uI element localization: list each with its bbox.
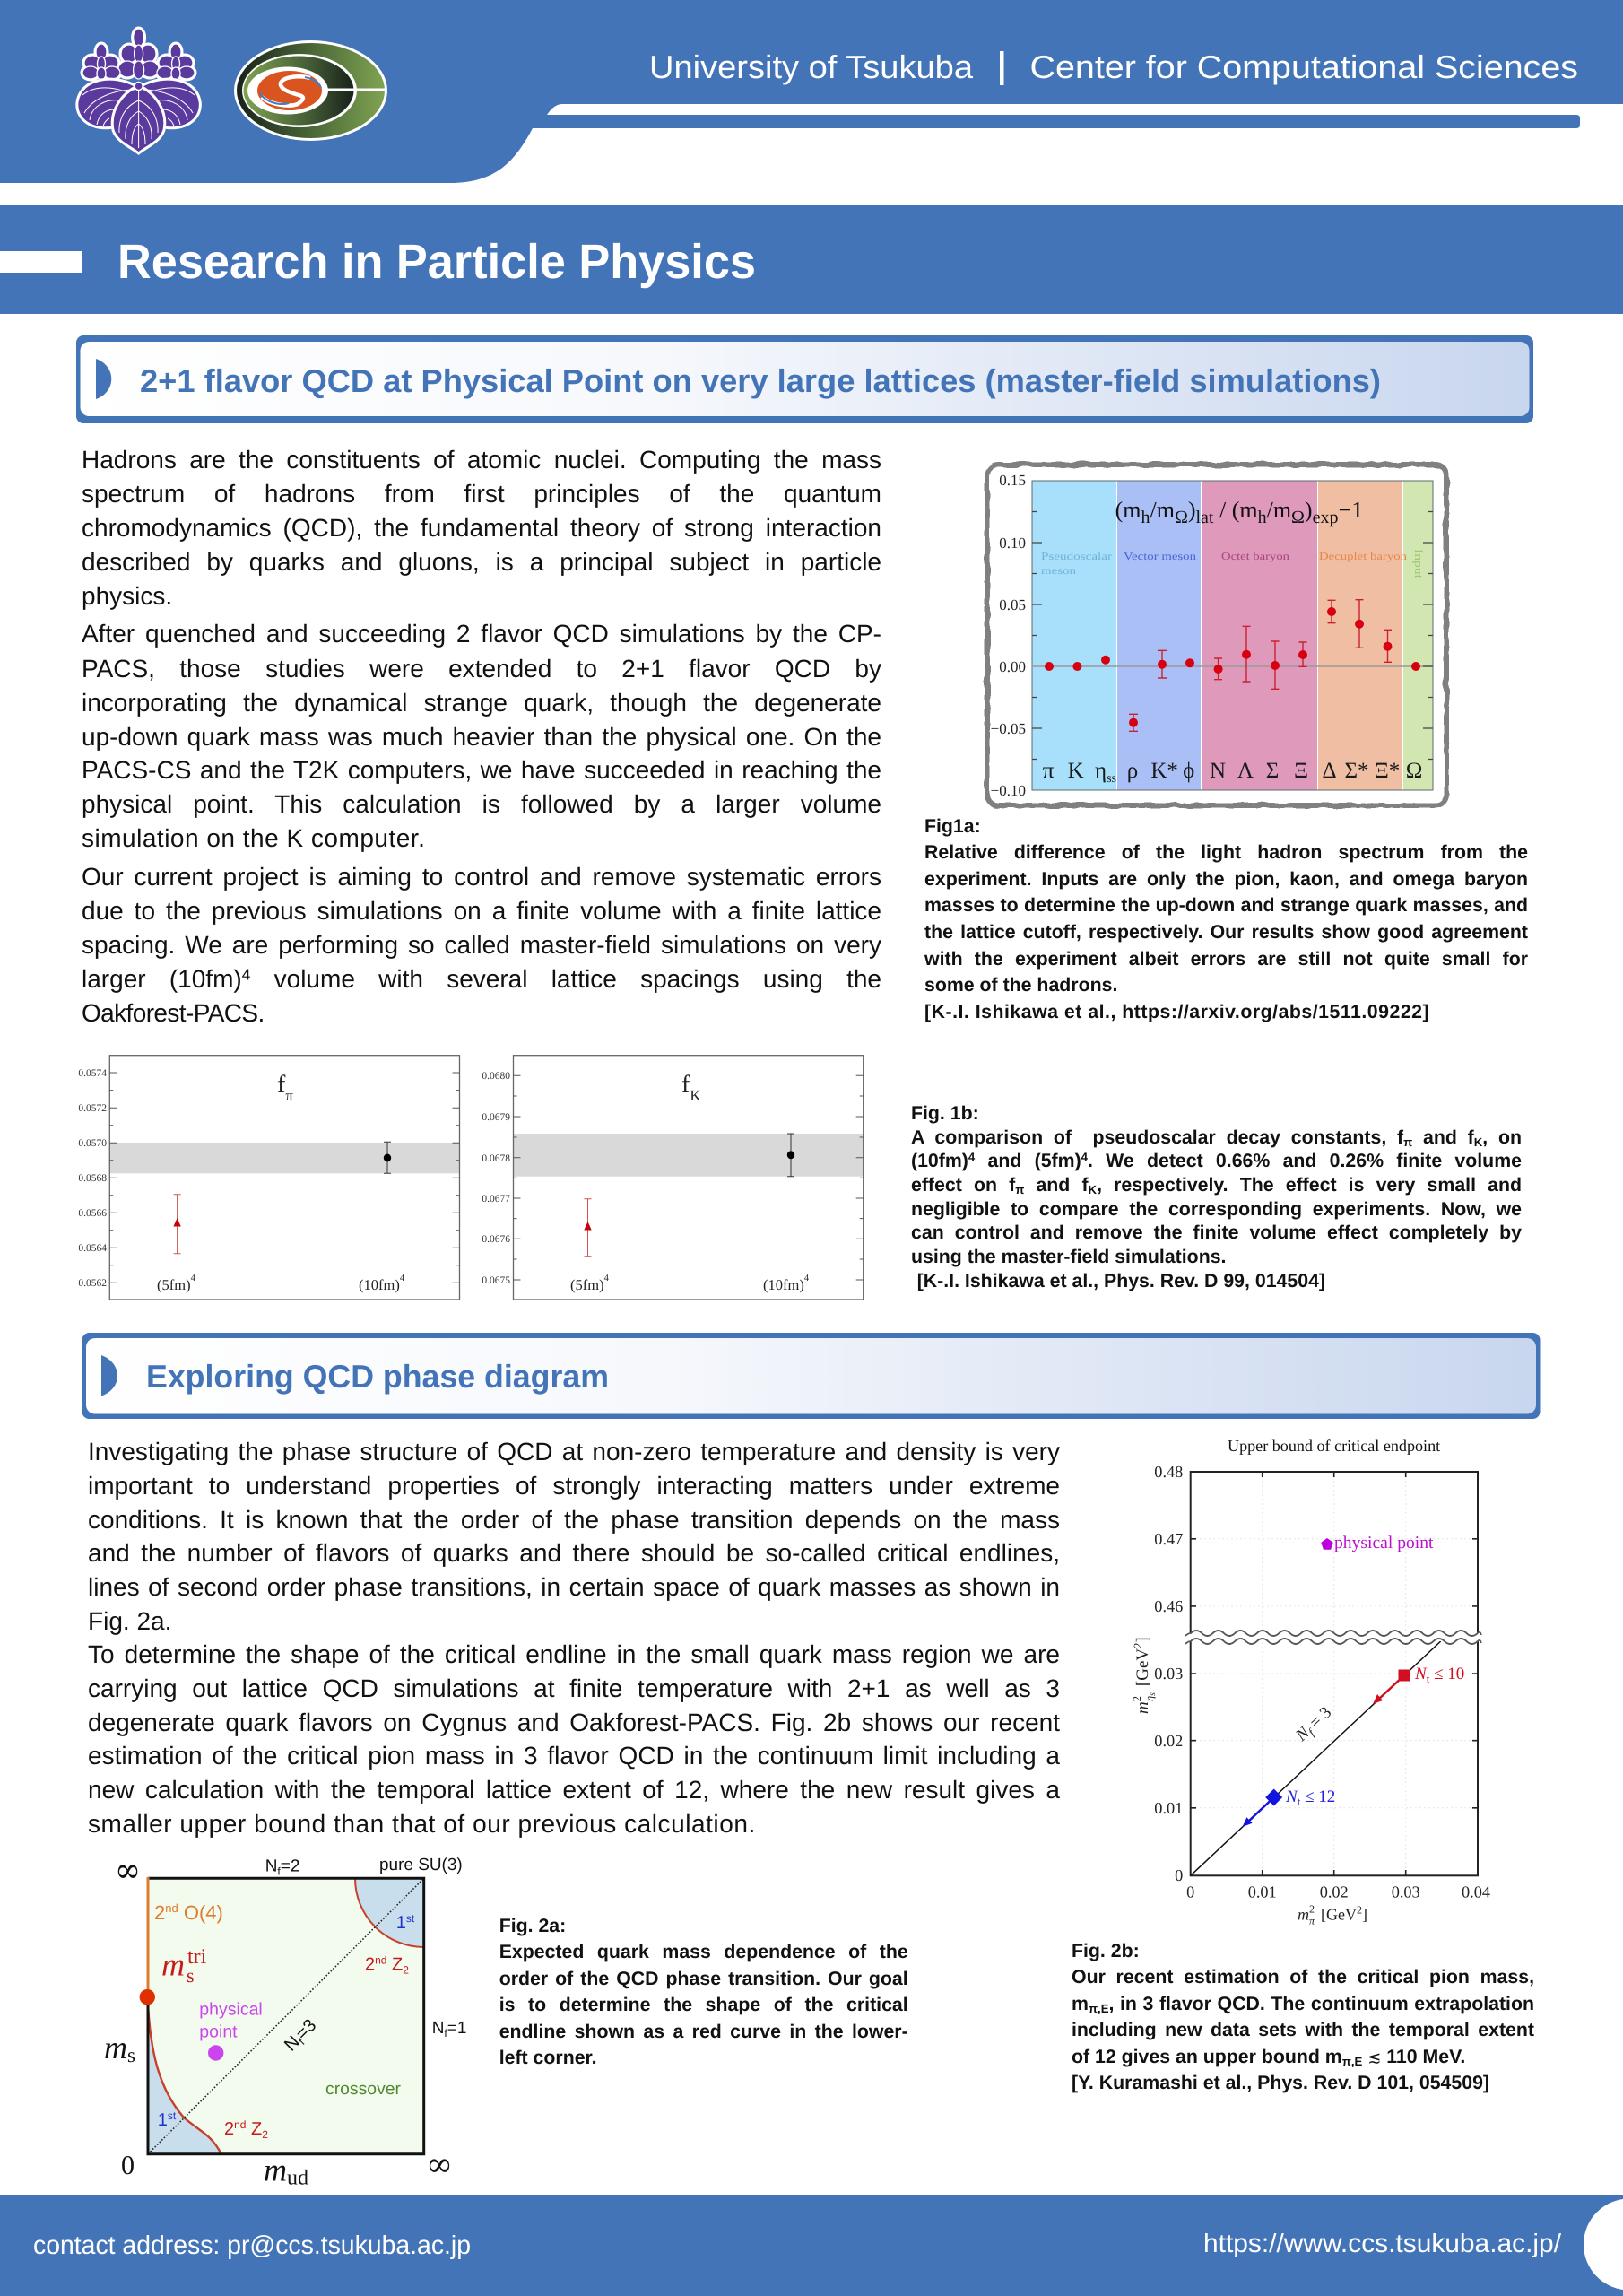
particle labels (1043, 759, 1422, 786)
text block: phase structure: lines of second order phase transitions, in certain space of quark masses as shown in (88, 1573, 1060, 1601)
caption: Fig 2a: Expected quark mass dependence of the (499, 1941, 908, 1962)
region and axis labels: 2 (154, 1901, 165, 1924)
grey result band (513, 1134, 864, 1177)
x axis label: 2 (1357, 1903, 1362, 1916)
grey result band (109, 1143, 460, 1173)
caption: Fig 2b (1072, 1940, 1534, 2093)
caption: Fig 1b: Fig. 1b: (911, 1102, 979, 1124)
y axis label: [GeV (1133, 1648, 1152, 1686)
text block: simulation history: simulation on the K computer. (82, 823, 425, 852)
math labels: m (161, 1947, 185, 1983)
y tick labels (1154, 1463, 1183, 1884)
text block: simulation history: PACS, those studies were extended to 2+1 flavor QCD by (82, 655, 881, 682)
region and axis labels: f (444, 2027, 447, 2039)
caption: Fig 1a: experiment. Inputs are only the pion, kaon, and omega baryon (924, 868, 1528, 890)
math labels: ∞ (426, 2144, 453, 2184)
x tick labels: 0.01 (1248, 1883, 1277, 1901)
particle labels: K (1068, 759, 1084, 783)
math labels: m (264, 2152, 287, 2188)
y axis labels: −0.05 (991, 720, 1026, 737)
icon: Center for Computational Sciences logo (234, 40, 387, 141)
y axis label: m (1133, 1701, 1152, 1714)
Nt 12 blue marker: ≤ 12 (1300, 1787, 1335, 1806)
region and axis labels: nd (234, 2118, 246, 2131)
tick labels: 0.0676 (482, 1234, 510, 1245)
text block: phase structure: important to understand properties of strongly interacting matters under extreme (88, 1472, 1060, 1500)
particle labels: Δ (1322, 759, 1337, 783)
chart title: Upper bound of critical endpoint (1228, 1437, 1440, 1455)
y axis label: η (1143, 1696, 1156, 1701)
chart title formula: ) (1188, 497, 1195, 523)
x axis label: 2 (1309, 1903, 1315, 1916)
chart title formula: lat (1195, 508, 1214, 527)
chart: Fig 2b upper bound of critical endpoint (1131, 1437, 1490, 1926)
caption: Fig 2a: order of the QCD phase transition. Our goal (499, 1968, 908, 1989)
x labels: 4 (604, 1274, 610, 1283)
text block: simulation history: After quenched and succeeding 2 flavor QCD simulations by the CP- (82, 619, 881, 648)
x tick labels: 0.04 (1462, 1883, 1490, 1901)
y tick labels: 0.47 (1154, 1530, 1183, 1548)
text block: simulation history: up-down quark mass was much heavier than the physical one. On the (82, 723, 881, 750)
text block: critical endline: new calculation with the temporal lattice extent of 12, where the new result gives a (88, 1776, 1060, 1804)
caption: Fig 1a: [K-.I. Ishikawa et al., https://arxiv.org/abs/1511.09222] (924, 1001, 1429, 1022)
tick labels: 0.0679 (482, 1112, 510, 1123)
text block: hadrons intro (82, 445, 881, 610)
data points (584, 1134, 794, 1257)
x labels: 4 (400, 1274, 405, 1283)
region and axis labels: nd (375, 1954, 386, 1967)
x axis label: π (1309, 1914, 1315, 1926)
Nf=3 label: N (1291, 1723, 1315, 1745)
caption: Fig 1a: some of the hadrons. (924, 974, 1117, 996)
text block: hadrons intro: spectrum of hadrons from first principles of the quantum (82, 479, 881, 508)
chart: f_K decay constant (482, 1055, 864, 1300)
Nt 10 red marker: ≤ 10 (1429, 1665, 1464, 1683)
region and axis labels: 1 (396, 1913, 406, 1933)
region and axis labels: =2 (281, 1857, 299, 1876)
Nt 10 red marker (1373, 1665, 1464, 1704)
text block: critical endline: estimation of the critical pion mass in 3 flavor QCD in the continuum limit including a (88, 1742, 1060, 1770)
tick labels: 0.0574 (78, 1068, 107, 1079)
text block: current project: due to the previous simulations on a finite volume with a finite lattice (82, 897, 881, 924)
region and axis labels (154, 1856, 466, 2141)
text block: current project: Our current project is aiming to control and remove systematic errors (82, 863, 881, 890)
text block: phase structure: Fig. 2a. (88, 1607, 171, 1635)
chart title: π (285, 1087, 293, 1104)
Nf=3 label: = 3 (1303, 1703, 1335, 1735)
y tick labels: 0.03 (1154, 1665, 1183, 1683)
particle labels: Σ* (1344, 759, 1369, 783)
section heading: 2+1 flavor QCD (76, 335, 1533, 423)
band labels: meson (1041, 564, 1076, 577)
region and axis labels: 2 (262, 2128, 268, 2141)
region and axis labels: =3 (292, 2015, 320, 2044)
error bars and data points (1045, 600, 1420, 731)
tick labels: 0.0562 (78, 1278, 107, 1289)
Nt 10 red marker: N (1414, 1665, 1428, 1683)
chart title formula: 1 (1351, 497, 1363, 523)
text block: hadrons intro: Hadrons are the constituents of atomic nuclei. Computing the mass (82, 445, 881, 474)
caption: Fig 2b: Fig. 2b: (1072, 1940, 1140, 1961)
x axis label: ] (1362, 1905, 1367, 1923)
chart title formula: ) (1305, 497, 1313, 523)
Nf=3 label: f (1306, 1725, 1318, 1738)
region and axis labels: 1 (158, 2110, 168, 2130)
caption: Fig 1b: [K-.I. Ishikawa et al., Phys. Rev. D 99, 014504] (917, 1270, 1325, 1292)
tick labels: 0.0568 (78, 1173, 107, 1184)
region and axis labels: 2 (365, 1955, 375, 1975)
text block: critical endline: smaller upper bound than that of our previous calculation. (88, 1810, 756, 1838)
math labels: s (187, 1964, 195, 1987)
caption: Fig 2b: [Y. Kuramashi et al., Phys. Rev. D 101, 054509] (1072, 2072, 1489, 2093)
band labels (1041, 549, 1426, 578)
header banner (0, 0, 1623, 183)
caption: Fig 1a (924, 815, 1528, 1022)
text block: phase structure: Investigating the phase structure of QCD at non-zero temperature and density is very (88, 1438, 1060, 1465)
math labels (104, 1850, 453, 2190)
caption: Fig 1a: Relative difference of the light hadron spectrum from the (924, 841, 1528, 863)
text block: phase structure: and the number of flavors of quarks and there should be so-called critical endlines, (88, 1539, 1060, 1567)
text block: critical endline: To determine the shape of the critical endline in the small quark mass region we are (88, 1640, 1060, 1668)
icon: University of Tsukuba paulownia crest (77, 29, 200, 153)
tick labels: 0.0675 (482, 1275, 510, 1286)
text block: simulation history: physical point. This calculation is followed by a larger volume (82, 789, 881, 818)
tick labels (78, 1068, 107, 1289)
band labels: Input (1412, 549, 1426, 578)
x tick labels: 0.02 (1320, 1883, 1349, 1901)
tick labels: 0.0678 (482, 1153, 510, 1164)
axes frame and ticks (1191, 1472, 1478, 1875)
caption: Fig 1a: Fig1a: (924, 815, 981, 837)
region and axis labels: f (277, 1866, 281, 1878)
region and axis labels: point (199, 2022, 238, 2042)
particle labels: Λ (1237, 759, 1254, 783)
chart: Fig 2a Columbia plot (104, 1850, 466, 2190)
chart title: f (681, 1071, 690, 1099)
header text: institutions (649, 48, 1578, 85)
text block: simulation history: PACS-CS and the T2K computers, we have succeeded in reaching the (82, 755, 881, 784)
particle labels: ρ (1127, 759, 1138, 783)
chart title: f (277, 1071, 285, 1099)
y axis label: 2 (1132, 1643, 1144, 1648)
physical point: physical point (1334, 1534, 1434, 1552)
math labels: ud (287, 2167, 308, 2190)
caption: Fig 2b: including new data sets with the temporal extent (1072, 2019, 1534, 2040)
caption: Fig 1b: effect on fπ and fK, respectively. The effect is very small and (911, 1174, 1522, 1196)
caption: Fig 2a: Fig. 2a: (499, 1915, 566, 1936)
coloured hadron-class bands (1032, 481, 1433, 790)
band labels: Decuplet baryon (1319, 550, 1407, 562)
caption: Fig 2a (499, 1915, 908, 2068)
website url: https://www.ccs.tsukuba.ac.jp/ (1203, 2230, 1562, 2258)
text block: critical endline (88, 1640, 1060, 1838)
caption: Fig 2a: is to determine the shape of the critical (499, 1994, 908, 2015)
x axis label: [GeV (1321, 1905, 1357, 1923)
band labels: Pseudoscalar (1041, 550, 1112, 562)
chart: f_pi decay constant (78, 1055, 461, 1300)
y tick labels: 0.02 (1154, 1732, 1183, 1750)
y axis labels: 0.00 (999, 658, 1026, 675)
tricritical point (140, 1989, 155, 2005)
y tick labels: 0.46 (1154, 1597, 1183, 1615)
y axis labels: −0.10 (991, 782, 1026, 799)
particle labels: K* (1150, 759, 1178, 783)
Nf=3 line (1191, 1641, 1441, 1875)
band labels: Vector meson (1124, 550, 1196, 562)
region and axis labels: 2 (403, 1964, 409, 1977)
particle labels: ss (1107, 772, 1116, 786)
physical point marker (208, 2045, 223, 2061)
caption: Fig 2a: left corner. (499, 2047, 597, 2068)
text block: hadrons intro: chromodynamics (QCD), the fundamental theory of strong interaction (82, 513, 881, 542)
text block: current project: Oakforest-PACS. (82, 999, 265, 1026)
header text: institutions: University of Tsukuba (649, 48, 974, 85)
region and axis labels: crossover (325, 2080, 402, 2099)
region and axis labels: N (432, 2019, 444, 2038)
text block: critical endline: carrying out lattice QCD simulations at finite temperature with 2+1 as well as 3 (88, 1674, 1060, 1702)
particle labels: ϕ (1183, 759, 1194, 783)
region and axis labels: pure SU(3) (379, 1856, 463, 1874)
region and axis labels: Z (246, 2119, 262, 2139)
math labels: tri (187, 1945, 207, 1969)
chart: Fig 1a hadron spectrum (983, 461, 1451, 809)
chart title: K (690, 1087, 701, 1104)
contact address: contact address: pr@ccs.tsukuba.ac.jp (33, 2231, 471, 2260)
region and axis labels: N (281, 2032, 304, 2056)
region and axis labels: st (168, 2109, 177, 2122)
tick labels (482, 1071, 510, 1286)
chart title formula: Ω (1175, 508, 1188, 527)
text block: critical endline: degenerate quark flavors on Cygnus and Oakforest-PACS. Fig. 2b shows our recent (88, 1709, 1060, 1736)
section heading: QCD phase diagram (82, 1333, 1541, 1419)
text block: simulation history (82, 619, 881, 852)
caption: Fig 2b: Our recent estimation of the critical pion mass, (1072, 1966, 1534, 1987)
tick labels: 0.0566 (78, 1208, 107, 1219)
header text: institutions: Center for Computational Sciences (1029, 48, 1578, 85)
math labels: 0 (121, 2151, 135, 2180)
tick labels: 0.0572 (78, 1103, 107, 1114)
text block: phase structure: conditions. It is known that the order of the phase transition depends on the mass (88, 1506, 1060, 1534)
particle labels: Ω (1406, 759, 1422, 783)
math labels: ∞ (115, 1850, 141, 1890)
tick labels: 0.0677 (482, 1194, 510, 1205)
text block: current project: larger (10fm)4 volume with several lattice spacings using the (82, 965, 881, 992)
caption: Fig 1b (911, 1102, 1522, 1292)
chart title formula: exp (1313, 508, 1338, 527)
text block: current project: spacing. We are performing so called master-field simulations on very (82, 931, 881, 958)
section heading: QCD phase diagram: Exploring QCD phase diagram (146, 1358, 609, 1395)
footer (0, 2195, 1623, 2296)
section heading: 2+1 flavor QCD: 2+1 flavor QCD at Physical Point on very large lattices (master-field simulations) (140, 362, 1381, 399)
region and axis labels: f (296, 2036, 308, 2048)
chart title formula: / (m (1213, 497, 1258, 523)
region and axis labels: =1 (447, 2019, 466, 2038)
text block: hadrons intro: described by quarks and gluons, is a principal subject in particle (82, 547, 881, 576)
x labels: 4 (191, 1274, 196, 1283)
tick labels: 0.0564 (78, 1243, 107, 1254)
x labels: (5fm) (157, 1276, 191, 1293)
caption: Fig 1a: with the experiment albeit errors are still not quite small for (924, 948, 1528, 970)
title: Research in Particle Physics (117, 235, 756, 289)
caption: Fig 1b: (10fm)4 and (5fm)4. We detect 0.66% and 0.26% finite volume (911, 1150, 1522, 1171)
region and axis labels: 2 (224, 2119, 234, 2139)
first order regions (148, 1878, 424, 2154)
region and axis labels: Z (386, 1955, 403, 1975)
caption: Fig 1b: A comparison of pseudoscalar decay constants, fπ and fK, on (911, 1126, 1522, 1149)
region and axis labels: nd (165, 1901, 178, 1915)
particle labels: Ξ* (1375, 759, 1400, 783)
text block: phase structure (88, 1438, 1060, 1635)
chart title formula: h (1141, 508, 1150, 527)
Nt 12 blue marker: t (1298, 1795, 1301, 1808)
y axis label: ] (1133, 1637, 1152, 1643)
grid (1191, 1472, 1478, 1875)
particle labels: π (1043, 759, 1055, 783)
chart title formula: − (1338, 497, 1351, 523)
tick labels: 0.0570 (78, 1138, 107, 1149)
y tick labels: 0.01 (1154, 1799, 1183, 1817)
x labels: (10fm) (359, 1276, 400, 1293)
particle labels: N (1210, 759, 1226, 783)
caption: Fig 2b: mπ,E, in 3 flavor QCD. The continuum extrapolation (1072, 1993, 1534, 2014)
y axis labels: 0.10 (999, 535, 1026, 552)
x tick labels (1186, 1883, 1490, 1901)
text block: simulation history: incorporating the dynamical strange quark, though the degenerate (82, 689, 881, 716)
x labels: (10fm) (763, 1276, 804, 1293)
chart title formula: /m (1150, 497, 1175, 523)
chart title formula: /m (1267, 497, 1291, 523)
y tick labels: 0.48 (1154, 1463, 1183, 1481)
Nt 12 blue marker: N (1285, 1787, 1298, 1806)
tick labels: 0.0680 (482, 1071, 510, 1082)
x labels: 4 (804, 1274, 810, 1283)
x axis label: m (1298, 1905, 1309, 1923)
x labels (570, 1274, 810, 1293)
caption: Fig 1a: the lattice cutoff, respectively. Our results show good agreement (924, 921, 1528, 943)
caption: Fig 1b: negligible to compare the corresponding experiments. Now, we (911, 1198, 1522, 1220)
particle labels: η (1095, 759, 1107, 783)
x labels (157, 1274, 405, 1293)
data points (173, 1142, 391, 1254)
caption: Fig 1b: using the master-field simulations. (911, 1246, 1226, 1267)
chart title formula: Ω (1291, 508, 1305, 527)
text block: hadrons intro: physics. (82, 581, 172, 610)
math labels: s (127, 2044, 135, 2066)
region and axis labels: N (265, 1857, 277, 1876)
y axis labels: 0.15 (999, 472, 1026, 489)
Nt 10 red marker: t (1427, 1672, 1430, 1685)
particle labels: Σ (1266, 759, 1279, 783)
axis break (1184, 1631, 1485, 1644)
text block: current project (82, 863, 881, 1026)
title banner (0, 205, 1623, 314)
Nt 12 blue marker (1243, 1787, 1335, 1827)
y axis labels (991, 472, 1026, 799)
x labels: (5fm) (570, 1276, 604, 1293)
caption: Fig 2a: endline shown as a red curve in the lower- (499, 2021, 908, 2042)
region and axis labels: physical (199, 2000, 263, 2020)
chart title formula: h (1258, 508, 1267, 527)
y axis label: s (1149, 1692, 1158, 1696)
math labels: m (104, 2030, 127, 2066)
chart title formula: (m (1115, 497, 1141, 523)
y axis labels: 0.05 (999, 596, 1026, 613)
band labels: Octet baryon (1221, 550, 1289, 562)
x tick labels: 0.03 (1392, 1883, 1420, 1901)
y tick labels: 0 (1175, 1866, 1183, 1884)
particle labels: Ξ (1294, 759, 1308, 783)
caption: Fig 2b: of 12 gives an upper bound mπ,E ≲ 110 MeV. (1072, 2046, 1465, 2067)
region and axis labels: O(4) (178, 1901, 223, 1924)
caption: Fig 1a: masses to determine the up-down and strange quark masses, and (924, 894, 1528, 916)
caption: Fig 1b: can control and remove the finite volume effect completely by (911, 1222, 1522, 1243)
region and axis labels: st (406, 1912, 415, 1925)
y axis label: 2 (1131, 1696, 1143, 1701)
x tick labels: 0 (1186, 1883, 1194, 1901)
